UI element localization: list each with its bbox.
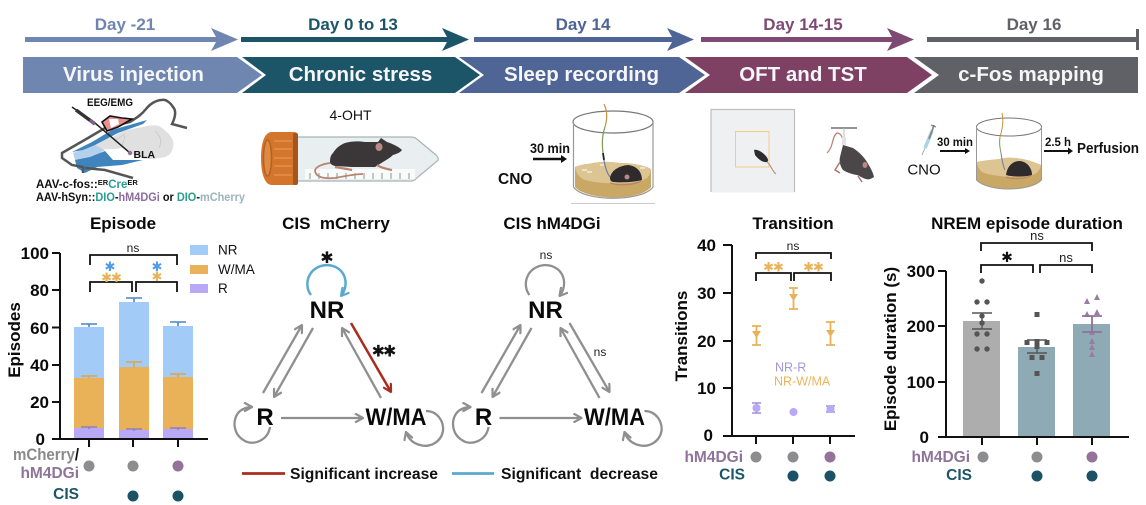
virus construct labels: ER xyxy=(98,178,109,187)
stage banner chevrons: Sleep recording xyxy=(504,63,659,86)
illustration: mouse in restraint tube xyxy=(261,107,438,185)
axes: 40 xyxy=(30,356,49,375)
legend: significant increase and decrease: Significant increase xyxy=(290,466,438,483)
stage banner chevrons: Virus injection xyxy=(63,63,204,86)
NR-R points xyxy=(752,403,835,416)
heading: NREM episode duration: NREM episode duration xyxy=(931,214,1123,233)
significance brackets: ns xyxy=(1059,250,1073,265)
axes xyxy=(5,244,208,449)
state nodes: R xyxy=(256,404,274,431)
axes: 30 xyxy=(697,284,716,303)
ns labels: ns xyxy=(540,248,552,262)
significance marks: ✱✱ xyxy=(372,342,396,360)
stage banner chevrons xyxy=(23,57,1138,93)
stage banner chevrons: Chronic stress xyxy=(289,63,432,86)
heading: CIS hM4DGi: CIS hM4DGi xyxy=(503,214,601,233)
virus construct labels: AAV-hSyn::DIO-hM4DGi or DIO-mCherry xyxy=(36,192,246,204)
group dots xyxy=(684,449,836,484)
state nodes: R xyxy=(475,404,492,431)
axes: 20 xyxy=(30,393,49,412)
group dots xyxy=(13,446,184,503)
CNO and 30 min label, sleep recording: CNO xyxy=(498,171,532,188)
axes: 20 xyxy=(697,332,716,351)
axes: Episodes xyxy=(5,302,24,378)
axes: Transitions xyxy=(672,291,691,381)
stacked bars xyxy=(74,298,193,439)
legend: R xyxy=(218,281,228,296)
ns labels xyxy=(540,248,606,359)
virus construct labels: ER xyxy=(127,178,138,187)
data points and error bars xyxy=(972,278,1102,376)
axes xyxy=(881,262,1129,447)
significance brackets: ns xyxy=(787,239,799,253)
NR-W/MA points xyxy=(752,288,835,345)
syringe and CNO label, c-Fos protocol xyxy=(907,125,973,178)
illustration: virus injection into brain: BLA xyxy=(134,149,155,161)
significance brackets: ns xyxy=(127,241,139,255)
illustration: sleep recording cylinder xyxy=(571,104,655,204)
group dots: CIS xyxy=(53,486,79,503)
perfusion step label xyxy=(1044,135,1139,157)
transition arrows xyxy=(235,265,443,446)
virus construct labels xyxy=(36,178,246,204)
axes: 0 xyxy=(36,430,45,449)
axes: 100 xyxy=(907,373,935,392)
syringe and CNO label, c-Fos protocol: 30 min xyxy=(937,137,973,149)
significance brackets: ✱ xyxy=(152,270,162,285)
significance brackets: ✱✱ xyxy=(803,260,823,276)
significance brackets: ✱✱ xyxy=(763,260,783,276)
state nodes xyxy=(475,297,645,431)
series labels: NR-W/MA xyxy=(774,374,831,388)
illustration: virus injection into brain: EEG/EMG xyxy=(87,97,133,109)
panel: transition dot chart xyxy=(672,214,855,484)
heading: episode: Episode xyxy=(90,214,156,233)
group dots: CIS xyxy=(946,467,972,484)
axes: 0 xyxy=(704,426,713,445)
timeline arrows with day labels: Day -21 xyxy=(95,15,155,34)
transition arrows xyxy=(453,265,662,446)
CNO and 30 min label, sleep recording: 30 min xyxy=(530,140,570,156)
significance brackets: ✱ xyxy=(105,260,115,275)
group dots: CIS xyxy=(719,466,745,484)
illustration: open field test xyxy=(711,110,794,192)
panel: CIS hM4DGi state transitions xyxy=(453,214,662,446)
syringe and CNO label, c-Fos protocol: CNO xyxy=(907,162,941,178)
group dots: hM4DGi xyxy=(20,465,79,482)
virus construct labels: AAV-c-fos:: xyxy=(36,179,98,191)
axes xyxy=(672,236,855,445)
illustration: virus injection into brain xyxy=(62,97,187,178)
axes: 10 xyxy=(697,379,716,398)
illustration: tail suspension test xyxy=(827,128,874,182)
axes: 300 xyxy=(907,262,935,281)
stage banner chevrons: OFT and TST xyxy=(739,63,867,86)
panel: NREM episode duration bar chart xyxy=(881,214,1129,484)
legend: significant increase and decrease xyxy=(242,466,658,483)
group dots xyxy=(911,449,1098,484)
ns labels: ns xyxy=(594,345,606,359)
significance brackets xyxy=(90,241,177,292)
axes: Episode duration (s) xyxy=(881,267,900,431)
state nodes: NR xyxy=(310,297,344,324)
panel: episode stacked bar chart xyxy=(5,214,255,503)
state nodes: NR xyxy=(528,297,563,324)
timeline arrows with day labels: Day 0 to 13 xyxy=(308,15,398,34)
axes: 200 xyxy=(907,317,935,336)
legend xyxy=(190,242,255,296)
axes: 60 xyxy=(30,319,49,338)
stage banner chevrons: c-Fos mapping xyxy=(958,63,1104,86)
significance brackets: ✱✱ xyxy=(101,271,121,286)
group dots: mCherry/ xyxy=(13,446,79,464)
timeline arrows with day labels xyxy=(25,15,1139,51)
significance marks: ✱ xyxy=(320,248,334,267)
axes: 80 xyxy=(30,281,49,300)
perfusion step label: 2.5 h xyxy=(1045,135,1071,149)
bars xyxy=(963,321,1110,437)
perfusion step label: Perfusion xyxy=(1077,141,1139,157)
state nodes: W/MA xyxy=(584,404,645,431)
axes: 40 xyxy=(697,236,716,255)
virus construct labels: Cre xyxy=(108,179,127,191)
significance marks xyxy=(320,248,396,360)
axes: 0 xyxy=(920,428,929,447)
significance brackets: ns xyxy=(1030,228,1044,243)
heading: CIS mCherry: CIS mCherry xyxy=(282,214,390,233)
state nodes: W/MA xyxy=(366,404,426,431)
heading: transition: Transition xyxy=(752,214,834,233)
group dots: hM4DGi xyxy=(911,449,970,466)
illustration: c-Fos cylinder xyxy=(976,113,1042,189)
group dots: hM4DGi xyxy=(684,449,743,466)
illustration: mouse in restraint tube: 4-OHT xyxy=(330,107,372,123)
series labels: NR-R xyxy=(775,360,806,374)
significance brackets: ✱ xyxy=(152,260,162,275)
timeline arrows with day labels: Day 14 xyxy=(556,15,611,34)
timeline arrows with day labels: Day 14-15 xyxy=(763,15,843,34)
timeline arrows with day labels: Day 16 xyxy=(1007,15,1061,34)
state nodes xyxy=(256,297,426,431)
legend: significant increase and decrease: Significant decrease xyxy=(501,466,658,483)
CNO and 30 min label, sleep recording xyxy=(498,140,570,188)
panel: CIS mCherry state transitions xyxy=(235,214,443,446)
legend: W/MA xyxy=(218,262,255,277)
series labels xyxy=(774,360,831,388)
significance brackets xyxy=(981,228,1092,273)
significance brackets xyxy=(756,239,831,281)
axes: 100 xyxy=(21,244,49,263)
significance brackets: ✱ xyxy=(1001,250,1013,266)
legend: NR xyxy=(218,242,238,258)
